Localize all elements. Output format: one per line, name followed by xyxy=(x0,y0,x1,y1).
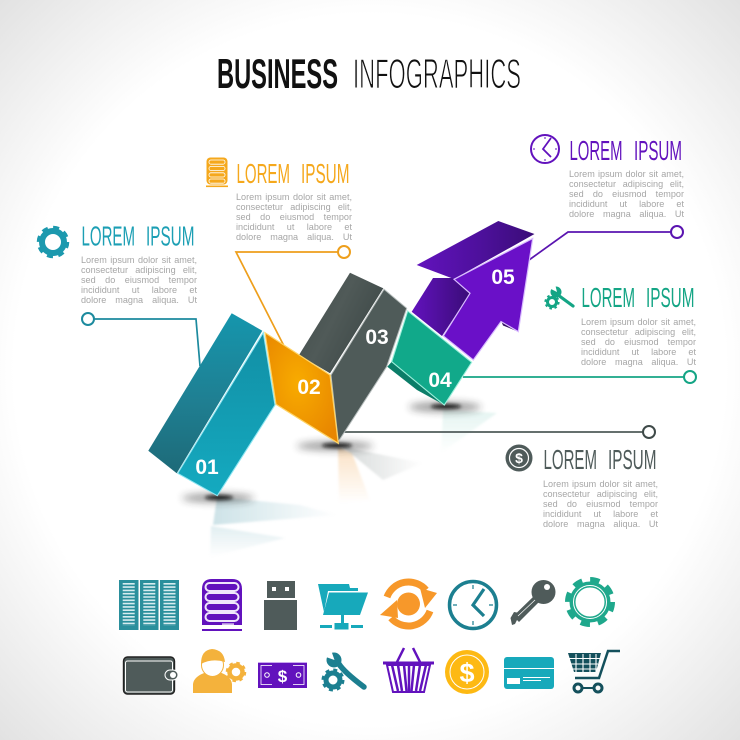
icon: wrench and gear xyxy=(323,650,364,690)
icon: server xyxy=(206,158,228,187)
body text: consectetur adipiscing elit, xyxy=(81,265,197,275)
icon: gear xyxy=(568,580,612,624)
body text: sed do eiusmod tempor xyxy=(543,499,658,509)
connector end: step 03 xyxy=(643,426,655,438)
body text: incididunt ut labore et xyxy=(236,222,352,232)
icon: sync arrows xyxy=(380,582,437,626)
body text: incididunt ut labore et xyxy=(543,509,658,519)
segment 01 xyxy=(148,313,275,496)
body text: sed do eiusmod tempor xyxy=(236,212,352,222)
icon: clock xyxy=(531,135,559,163)
connector: step 02 xyxy=(236,252,338,346)
icon: shopping cart xyxy=(568,651,620,692)
body text xyxy=(543,480,658,532)
segment 04: 04 xyxy=(428,369,452,392)
heading: LOREM xyxy=(582,282,635,313)
body text: sed do eiusmod tempor xyxy=(569,189,684,199)
title: BUSINESS xyxy=(217,50,338,97)
body text xyxy=(581,318,696,370)
icon: credit card xyxy=(504,657,554,689)
body text: dolore magna aliqua. Ut xyxy=(543,519,658,529)
segment 02: 02 xyxy=(297,376,321,399)
body text xyxy=(569,170,684,222)
body text: consectetur adipiscing elit, xyxy=(543,489,658,499)
body text: dolore magna aliqua. Ut xyxy=(569,209,684,219)
body text: dolore magna aliqua. Ut xyxy=(236,232,352,242)
icon: banknote xyxy=(258,662,307,688)
body text xyxy=(81,256,197,308)
connector: step 04 xyxy=(463,376,684,378)
icon: dollar coin xyxy=(506,444,532,472)
icon: usb drive xyxy=(264,581,297,630)
title: INFOGRAPHICS xyxy=(353,50,521,97)
connector: step 01 xyxy=(94,319,200,366)
icon: wrench and gear xyxy=(546,284,573,308)
connector end: step 01 xyxy=(82,313,94,325)
icon: wallet xyxy=(124,657,178,694)
icon: key xyxy=(510,580,556,625)
icon: shopping basket xyxy=(383,648,434,692)
heading: LOREM xyxy=(570,135,622,166)
heading: LOREM xyxy=(82,220,135,252)
icon: dollar coin: $ xyxy=(515,450,523,466)
title xyxy=(217,50,521,97)
segment 04 xyxy=(387,311,472,405)
heading: IPSUM xyxy=(301,158,350,189)
icon: clock xyxy=(450,582,496,628)
body text: sed do eiusmod tempor xyxy=(581,337,696,347)
body text: consectetur adipiscing elit, xyxy=(236,202,352,212)
body text: dolore magna aliqua. Ut xyxy=(581,357,696,367)
icon row 2 xyxy=(124,648,620,694)
connector: step 03 xyxy=(343,431,643,433)
segment 03 xyxy=(299,273,407,442)
segment 03: 03 xyxy=(365,326,389,349)
icon: gold coin xyxy=(445,650,489,694)
body text: consectetur adipiscing elit, xyxy=(569,179,684,189)
icon: network folder xyxy=(318,584,368,630)
heading: LOREM xyxy=(236,158,290,189)
heading: IPSUM xyxy=(146,220,194,252)
heading: LOREM xyxy=(544,444,597,475)
connector: step 05 xyxy=(529,232,671,260)
body text: incididunt ut labore et xyxy=(581,347,696,357)
icon: gold coin: $ xyxy=(459,658,475,688)
heading: IPSUM xyxy=(634,135,682,166)
connector end: step 05 xyxy=(671,226,683,238)
segment 02 xyxy=(265,333,338,443)
panel: step 01 xyxy=(38,220,197,308)
panel: step 02 xyxy=(206,158,352,245)
connector end: step 02 xyxy=(338,246,350,258)
icon: worker with gear xyxy=(193,649,245,693)
body text: consectetur adipiscing elit, xyxy=(581,327,696,337)
icon: banknote: $ xyxy=(278,667,288,686)
heading: IPSUM xyxy=(646,282,694,313)
icon: server racks xyxy=(119,580,179,630)
body text: sed do eiusmod tempor xyxy=(81,275,197,285)
floor reflections and shadows xyxy=(182,402,497,557)
icon row 1 xyxy=(119,579,612,631)
segment 05 xyxy=(412,221,534,360)
body text: incididunt ut labore et xyxy=(81,285,197,295)
body text: incididunt ut labore et xyxy=(569,199,684,209)
connector end: step 04 xyxy=(684,371,696,383)
icon: gear xyxy=(38,228,68,256)
segment 05: 05 xyxy=(491,266,515,289)
heading: IPSUM xyxy=(608,444,656,475)
panel: step 05 xyxy=(531,135,684,222)
body text: dolore magna aliqua. Ut xyxy=(81,295,197,305)
panel: step 04 xyxy=(546,282,696,370)
panel: step 03 xyxy=(506,444,658,532)
3D arrow xyxy=(148,221,535,496)
body text xyxy=(236,193,352,245)
icon: purple server xyxy=(202,579,242,631)
segment 01: 01 xyxy=(195,456,219,479)
